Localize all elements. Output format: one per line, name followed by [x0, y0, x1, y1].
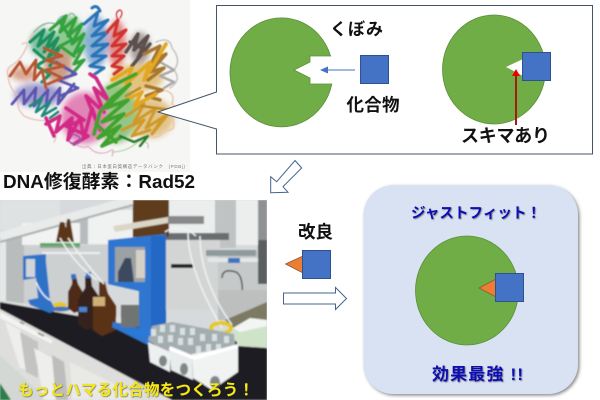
image credit: 出典：日本蛋白質構造データバンク (PDBj): [82, 163, 186, 170]
lab photo: [0, 200, 267, 400]
label: 改良: 改良: [298, 222, 333, 242]
bright green: [94, 74, 136, 146]
blue: [84, 7, 108, 76]
heading: DNA repair enzyme: DNA修復酵素：Rad52: [3, 171, 195, 192]
dark gray: [126, 34, 150, 66]
tubing: [36, 228, 232, 328]
caption on photo: もっとハマる化合物をつくろう！: [18, 381, 254, 399]
arrow: right: [284, 288, 346, 310]
pale loops: [7, 24, 56, 142]
sash clamps: [168, 216, 204, 224]
arrow: compound toward pocket: [320, 66, 355, 74]
red arrow to gap: [512, 69, 520, 125]
label: 化合物: 化合物: [346, 95, 400, 115]
magenta: [46, 74, 108, 144]
top shelf with amber bottles: [56, 219, 74, 242]
amber bottles: [68, 276, 84, 313]
label: スキマあり: スキマあり: [461, 126, 550, 146]
walls and windows: [13, 216, 54, 228]
label: くぼみ: くぼみ: [330, 20, 383, 39]
improved compound icon: [286, 250, 330, 278]
compound square in pocket: [522, 52, 550, 80]
orange brown: [10, 48, 64, 88]
yellow ring: [211, 323, 231, 333]
left blue instrument: [23, 254, 56, 313]
fitted compound: [479, 274, 524, 302]
circle with gap: [442, 15, 546, 124]
teal green: [30, 30, 60, 82]
heading: ジャストフィット: ジャストフィット！: [411, 206, 541, 222]
vial tops: [148, 322, 236, 366]
green: [50, 16, 84, 74]
red: [107, 20, 126, 74]
pocket circle with notch: [230, 18, 332, 127]
purple: [12, 62, 78, 106]
callout panel: compound and pocket: [158, 6, 592, 154]
gold: [112, 44, 166, 106]
brown: [144, 46, 166, 100]
gray right: [160, 62, 174, 88]
tube and hoses: [220, 269, 244, 291]
ceiling pipe: [0, 200, 133, 237]
compound square: [360, 56, 388, 84]
tissue box: [233, 322, 267, 348]
vial crates: [148, 342, 170, 372]
teal lower: [30, 98, 58, 118]
arrow: down-left to photo: [271, 160, 302, 193]
label: 効果最強: 効果最強 !!: [432, 365, 523, 384]
cabinets and floor: [0, 300, 172, 400]
main blue instrument: [108, 234, 166, 345]
fitted circle: [416, 236, 518, 345]
black bench: [0, 302, 267, 400]
protein structure image: Rad52: [0, 0, 190, 172]
gap wedge: [506, 59, 523, 76]
panel: just fit result: [364, 185, 578, 394]
